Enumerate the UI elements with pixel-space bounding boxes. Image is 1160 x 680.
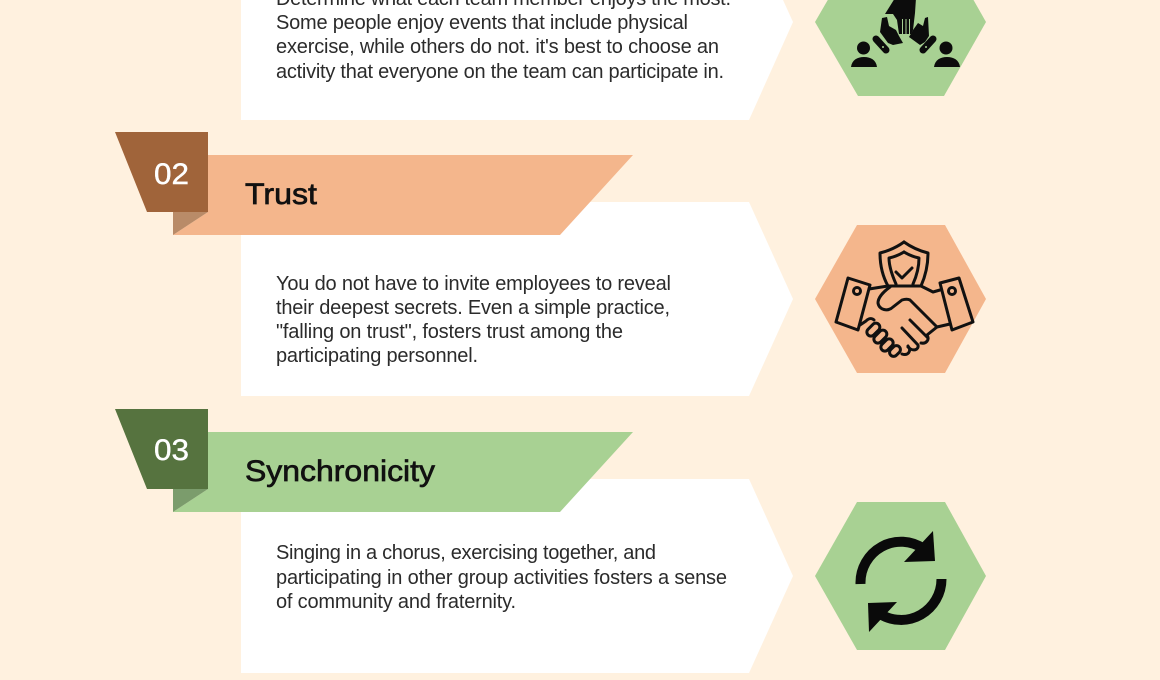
section 3 number tag: [115, 409, 208, 489]
icon: sync arrows: [860, 531, 942, 632]
section 3 heading: Synchronicity: [245, 455, 435, 488]
section 2 text: "falling on trust", fosters trust among the: [276, 321, 623, 343]
section 2 ribbon: [173, 155, 633, 235]
section 1 text: activity that everyone on the team can participate in.: [276, 61, 724, 83]
section 3 ribbon fold: [173, 489, 208, 512]
section 3 text: participating in other group activities fosters a sense: [276, 567, 727, 589]
section 2 ribbon fold: [173, 212, 208, 235]
section 1 text: [276, 0, 731, 83]
section 2 number tag: [115, 132, 208, 212]
panel: section 2 trust: [115, 132, 986, 396]
section 3 text: [276, 542, 727, 613]
section 3 hexagon: [815, 502, 986, 650]
section 3 text: Singing in a chorus, exercising together, and: [276, 542, 656, 564]
icon: team hands and people: [851, 0, 960, 67]
panel: section 3 synchronicity: [115, 409, 986, 673]
section 2 card: [241, 202, 793, 396]
section 1 text: exercise, while others do not. it's best to choose an: [276, 36, 719, 58]
section 2 text: You do not have to invite employees to reveal: [276, 273, 671, 295]
icon: handshake with shield: [836, 242, 973, 358]
section 1 hexagon: [815, 0, 986, 96]
section 3 card: [241, 479, 793, 673]
section 3 ribbon: [173, 432, 633, 512]
section 1 text: Some people enjoy events that include physical: [276, 12, 688, 34]
section 3 number: 03: [154, 434, 189, 467]
section 2 heading: Trust: [245, 178, 318, 211]
section 2 number: 02: [154, 158, 189, 191]
panel: section 1: [241, 0, 986, 120]
section 2 text: participating personnel.: [276, 345, 478, 367]
section 2 hexagon: [815, 225, 986, 373]
section 1 card: [241, 0, 793, 120]
section 2 text: [276, 273, 671, 367]
section 2 text: their deepest secrets. Even a simple practice,: [276, 297, 670, 319]
section 3 text: of community and fraternity.: [276, 591, 516, 613]
